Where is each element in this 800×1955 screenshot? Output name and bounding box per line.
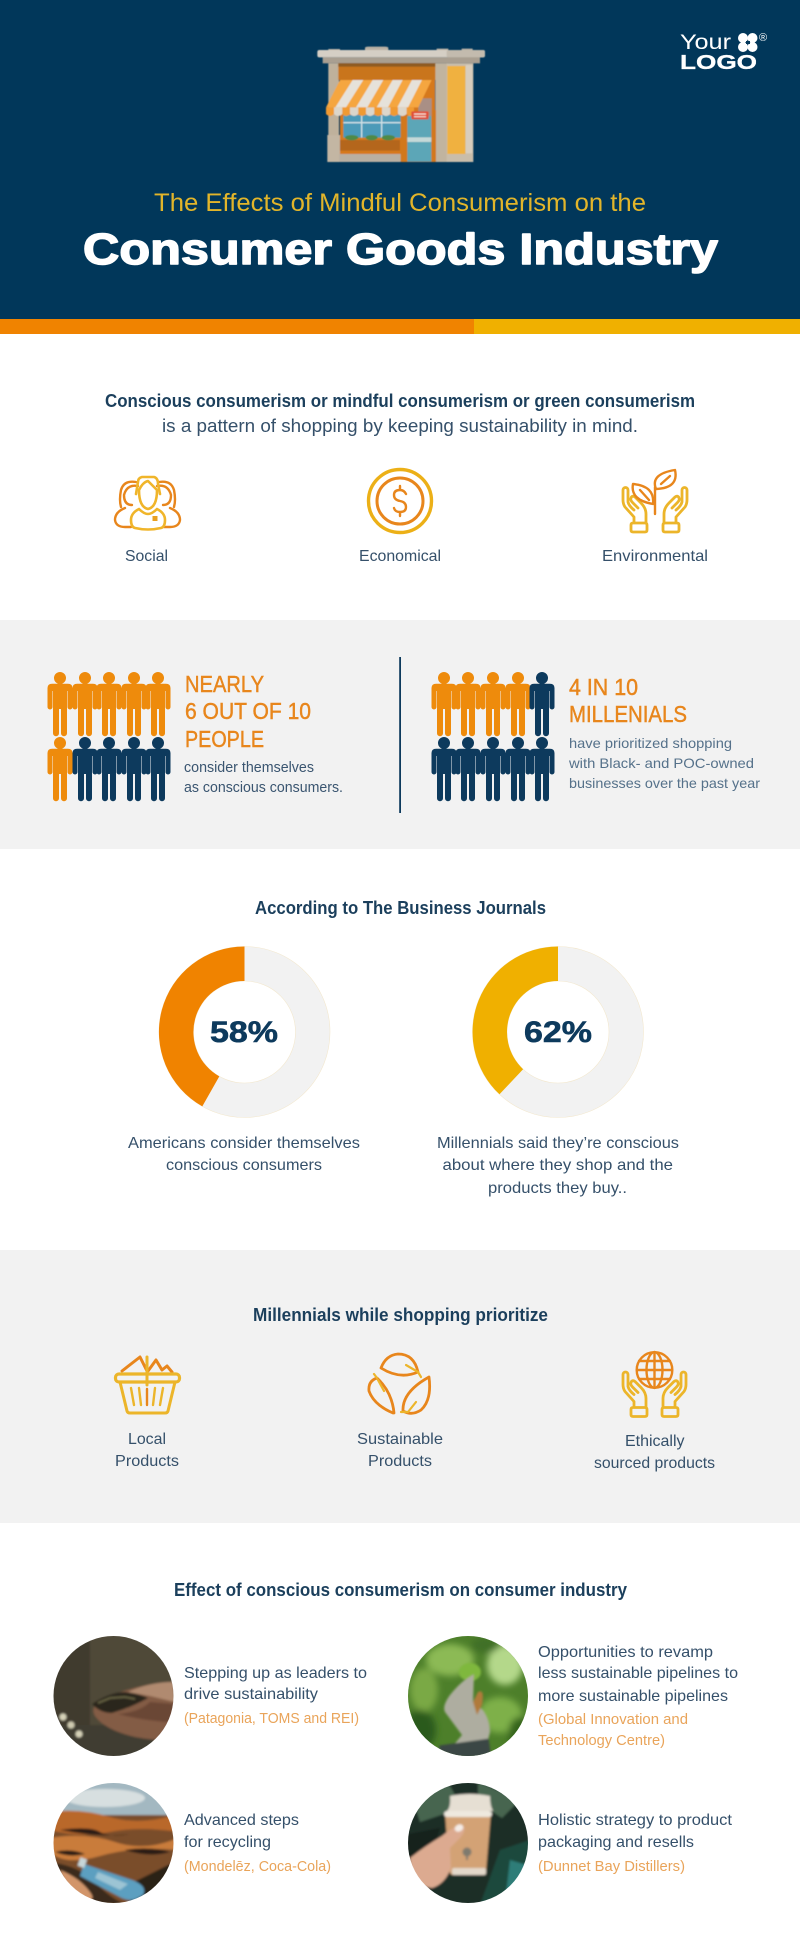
text: holistic strategy: Holistic strategy to product (538, 1812, 733, 1829)
door (401, 110, 436, 162)
text: recycling: for recycling (184, 1834, 271, 1851)
stat: nearly 6 out of 10: as conscious consumers. (184, 780, 343, 796)
photo: gloved hand with leaf (408, 1636, 528, 1756)
photo: hands holding soil (54, 1636, 174, 1756)
chart: 62% donut: 62% (524, 1016, 592, 1049)
text: opportunities: Opportunities to revamp (538, 1644, 713, 1661)
text: recycling (184, 1812, 331, 1875)
caption: 62% (437, 1135, 679, 1197)
chart: 58% donut (159, 946, 330, 1118)
label: local products: Local (128, 1431, 166, 1448)
label: economical: Economical (359, 548, 441, 565)
stat: nearly 6 out of 10: PEOPLE (185, 726, 264, 752)
text: holistic strategy: (Dunnet Bay Distillers) (538, 1859, 685, 1875)
stat: 4 in 10 millenials: have prioritized shopping (569, 735, 732, 751)
pictogram: 4 of 10 (432, 672, 554, 801)
logo: LOGO (680, 52, 757, 74)
label: local products (115, 1431, 179, 1470)
text: opportunities: Technology Centre) (538, 1733, 665, 1749)
label: environmental: Environmental (602, 548, 708, 565)
heading: Millennials while shopping prioritize (253, 1305, 548, 1325)
stat: 4 in 10 millenials: 4 IN 10 (569, 674, 638, 700)
icon: environmental (623, 470, 687, 532)
chart: 62% donut (472, 946, 644, 1118)
text: opportunities: (Global Innovation and (538, 1712, 688, 1728)
pictogram: 6 of 10 (48, 672, 170, 801)
intro heading: Conscious consumerism or mindful consumerism or green consumerism (105, 391, 695, 411)
label: social: Social (125, 548, 168, 565)
heading: business journals: According to The Business Journals (255, 898, 546, 918)
text: opportunities: more sustainable pipelines (538, 1688, 728, 1705)
icon: basket (116, 1357, 180, 1413)
panel: millennials prioritize (0, 1250, 800, 1523)
caption: 58% (128, 1135, 360, 1174)
label: sustainable products (357, 1431, 443, 1470)
photo: plastic bottle on rock (54, 1783, 174, 1903)
text: leaders: (Patagonia, TOMS and REI) (184, 1711, 359, 1727)
stat: 4 in 10 millenials: MILLENIALS (569, 701, 687, 727)
window (343, 115, 401, 138)
stat: nearly 6 out of 10: consider themselves (184, 760, 314, 776)
icon: storefront (317, 47, 485, 162)
stat: nearly 6 out of 10: 6 OUT OF 10 (185, 698, 311, 724)
logo (680, 31, 767, 74)
stat: 4 in 10 millenials (568, 674, 760, 791)
icon: leaves (369, 1354, 430, 1413)
text: leaders: drive sustainability (184, 1686, 318, 1703)
photo: hand holding paper cup (408, 1783, 528, 1903)
panel: header (0, 0, 800, 319)
caption: 62%: Millennials said they’re conscious (437, 1135, 679, 1152)
chart: 58% donut: 58% (210, 1016, 278, 1049)
panel: statistics (0, 620, 800, 849)
intro heading: is a pattern of shopping by keeping sustainability in mind. (162, 416, 638, 436)
text: leaders (184, 1665, 367, 1727)
subtitle: The Effects of Mindful Consumerism on the (154, 189, 646, 217)
caption: 62%: about where they shop and the (442, 1157, 673, 1174)
stat: nearly 6 out of 10 (184, 671, 343, 796)
text: opportunities (538, 1644, 738, 1749)
logo: ® (759, 32, 767, 44)
logo: Your (680, 31, 731, 54)
text: holistic strategy: packaging and resells (538, 1834, 694, 1851)
text: recycling: Advanced steps (184, 1812, 299, 1829)
caption: 62%: products they buy.. (488, 1180, 627, 1197)
caption: 58%: conscious consumers (166, 1157, 322, 1174)
title: Consumer Goods Industry (83, 225, 719, 274)
icon: social (115, 477, 180, 530)
intro heading (105, 391, 695, 436)
text: leaders: Stepping up as leaders to (184, 1665, 367, 1682)
icon: globe in hands (623, 1352, 686, 1416)
text: opportunities: less sustainable pipelines to (538, 1665, 738, 1682)
stat: nearly 6 out of 10: NEARLY (185, 671, 264, 697)
label: sustainable products: Products (368, 1453, 432, 1470)
icon: economical (368, 470, 432, 532)
text: recycling: (Mondelēz, Coca-Cola) (184, 1859, 331, 1875)
accent bar (0, 319, 800, 334)
flower box (340, 140, 400, 151)
label: ethically sourced: sourced products (594, 1455, 715, 1472)
label: ethically sourced (594, 1433, 715, 1472)
stat: 4 in 10 millenials: businesses over the past year (569, 775, 760, 791)
awning (326, 80, 432, 107)
label: ethically sourced: Ethically (625, 1433, 684, 1450)
caption: 58%: Americans consider themselves (128, 1135, 360, 1152)
heading: effect: Effect of conscious consumerism on consumer industry (174, 1580, 627, 1600)
text: holistic strategy (538, 1812, 733, 1875)
stat: 4 in 10 millenials: with Black- and POC-owned (568, 755, 754, 771)
label: local products: Products (115, 1453, 179, 1470)
label: sustainable products: Sustainable (357, 1431, 443, 1448)
